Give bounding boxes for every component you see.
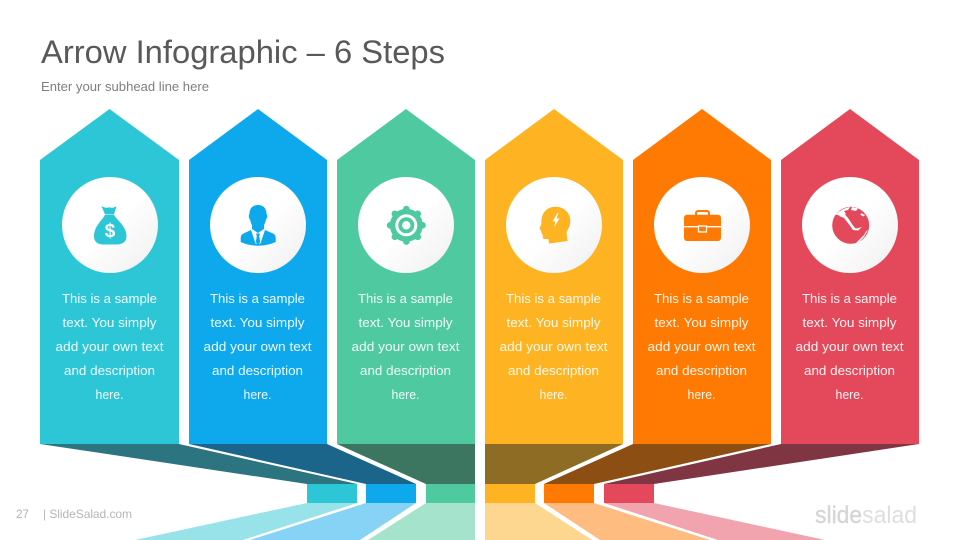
funnel: light perspective bands [135, 503, 825, 540]
panel: step 3 [337, 109, 475, 444]
subhead: Enter your subhead line here [41, 80, 209, 94]
text block 4 [500, 291, 608, 402]
arrow shape 5 [633, 109, 771, 444]
panel: step 6 [781, 109, 919, 444]
panel: step 1 [40, 109, 179, 444]
icon: money bag: $ [105, 221, 116, 242]
text block 1: add your own text [56, 339, 164, 354]
text block 1: text. You simply [62, 315, 157, 330]
text block 5: This is a sample [654, 291, 749, 306]
text block 3: and description [360, 363, 451, 378]
text block 3: text. You simply [358, 315, 453, 330]
icon circle 4 [506, 177, 602, 273]
text block 6 [796, 291, 904, 402]
text block 6: text. You simply [802, 315, 897, 330]
text block 6: This is a sample [802, 291, 897, 306]
text block 1 [56, 291, 164, 402]
panel: step 2 [189, 109, 327, 444]
icon circle 1 [62, 177, 158, 273]
text block 2: add your own text [204, 339, 312, 354]
icon circle 3 [358, 177, 454, 273]
text block 1: and description [64, 363, 155, 378]
arrow shape 1 [40, 109, 179, 444]
funnel: colour blocks [307, 484, 654, 503]
arrow shape 2 [189, 109, 327, 444]
text block 2 [204, 291, 312, 402]
text block 5 [648, 291, 756, 402]
panel: step 5 [633, 109, 771, 444]
text block 3: This is a sample [358, 291, 453, 306]
text block 3: add your own text [352, 339, 460, 354]
text block 4: add your own text [500, 339, 608, 354]
text block 2: and description [212, 363, 303, 378]
text block 4: text. You simply [506, 315, 601, 330]
text block 6: here. [836, 387, 864, 402]
icon: briefcase [684, 211, 721, 241]
text block 2: here. [244, 387, 272, 402]
icon: globe [832, 207, 869, 244]
icon: head with bolt [539, 207, 570, 244]
icon: businessman [241, 205, 276, 246]
text block 2: This is a sample [210, 291, 305, 306]
text block 4: here. [540, 387, 568, 402]
text block 5: add your own text [648, 339, 756, 354]
title: Arrow Infographic – 6 Steps [41, 34, 445, 70]
icon circle 5 [654, 177, 750, 273]
arrow shape 6 [781, 109, 919, 444]
text block 6: add your own text [796, 339, 904, 354]
text block 6: and description [804, 363, 895, 378]
text block 3 [352, 291, 460, 402]
text block 1: here. [96, 387, 124, 402]
logo: slidesalad [815, 502, 917, 529]
arrow shape 3 [337, 109, 475, 444]
arrow shape 4 [485, 109, 623, 444]
footer site name: | SlideSalad.com [43, 507, 132, 521]
panel: step 4 [485, 109, 623, 444]
text block 3: here. [392, 387, 420, 402]
text block 5: text. You simply [654, 315, 749, 330]
icon: money bag [94, 206, 126, 244]
text block 4: and description [508, 363, 599, 378]
icon circle 6 [802, 177, 898, 273]
icon: gear [390, 209, 423, 242]
text block 2: text. You simply [210, 315, 305, 330]
text block 5: here. [688, 387, 716, 402]
text block 4: This is a sample [506, 291, 601, 306]
funnel: dark perspective bands [40, 444, 919, 484]
icon circle 2 [210, 177, 306, 273]
text block 5: and description [656, 363, 747, 378]
page number: 27 [16, 507, 29, 521]
text block 1: This is a sample [62, 291, 157, 306]
